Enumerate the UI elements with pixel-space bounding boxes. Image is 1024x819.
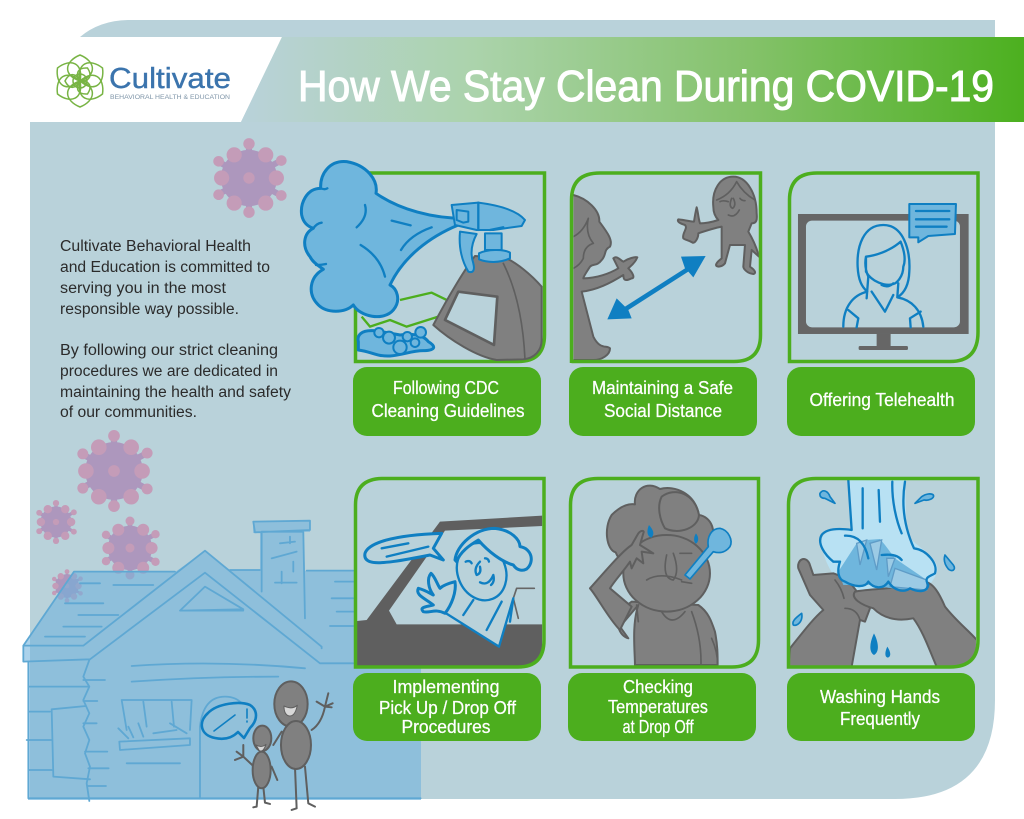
house fill: [23, 520, 421, 800]
virus particle: middle: [102, 516, 160, 580]
intro text: serving you in the most: [60, 280, 227, 297]
panel: CDC cleaning: [301, 162, 544, 362]
house illustration: [23, 520, 421, 810]
label: pick up and drop off: [353, 673, 541, 741]
label: CDC guidelines: Following CDC: [393, 378, 499, 398]
label: telehealth: Offering Telehealth: [810, 390, 954, 410]
label: washing hands: Washing Hands: [820, 687, 940, 707]
panel: social distance: [570, 173, 760, 363]
intro text: [60, 238, 291, 421]
label: pick up and drop off: Implementing: [392, 677, 500, 697]
family waving: [235, 681, 333, 810]
intro text: of our communities.: [60, 404, 197, 421]
icon: flower rosette: [51, 55, 109, 107]
panel: washing hands: [788, 478, 978, 667]
panel: telehealth: [790, 173, 978, 362]
frame: [788, 478, 978, 667]
label: telehealth: [787, 367, 975, 436]
speech bubble: [202, 703, 256, 739]
wordmark: Cultivate: [109, 63, 231, 95]
intro text: procedures we are dedicated in: [60, 363, 278, 380]
label: temperatures: [568, 673, 756, 741]
frame: [790, 173, 978, 362]
illustration: two people and arrow: [570, 177, 759, 360]
illustration: person with thermometer: [590, 486, 731, 665]
house outlines: [23, 521, 421, 801]
label: CDC guidelines: [353, 367, 541, 436]
frame: [356, 478, 544, 667]
virus particle: upper left: [77, 430, 153, 512]
illustration: hands under water: [788, 478, 978, 667]
frame: [572, 173, 760, 363]
intro text: and Education is committed to: [60, 259, 270, 276]
intro text: By following our strict cleaning: [60, 342, 278, 359]
illustration: driver in car: [357, 516, 542, 666]
label: temperatures: Temperatures: [608, 697, 708, 717]
label: CDC guidelines: Cleaning Guidelines: [372, 401, 524, 421]
panel: temperature check: [570, 478, 758, 667]
frame: [356, 173, 544, 362]
intro text: maintaining the health and safety: [60, 384, 291, 401]
logo plate: [30, 37, 282, 122]
virus particle: small left: [36, 500, 77, 544]
label: washing hands: Frequently: [840, 709, 920, 729]
intro text: Cultivate Behavioral Health: [60, 238, 251, 255]
label: pick up and drop off: Pick Up / Drop Off: [379, 698, 517, 718]
logo: [51, 55, 231, 107]
header banner: [30, 37, 1024, 122]
label: social distance: [569, 367, 757, 436]
illustration: spray bottle: [301, 162, 542, 360]
label: social distance: Social Distance: [604, 401, 722, 421]
label: social distance: Maintaining a Safe: [592, 378, 733, 398]
label: pick up and drop off: Procedures: [402, 717, 490, 737]
panel: pick up and drop off: [356, 478, 544, 667]
title bar: [241, 37, 1024, 122]
tagline: BEHAVIORAL HEALTH & EDUCATION: [110, 94, 230, 101]
label: temperatures: at Drop Off: [622, 717, 694, 737]
virus particle: top: [213, 138, 287, 218]
label: temperatures: Checking: [623, 677, 693, 697]
intro text: responsible way possible.: [60, 301, 239, 318]
illustration: monitor with woman: [798, 204, 969, 350]
virus particle: on roof: [52, 569, 83, 603]
label: washing hands: [787, 673, 975, 741]
frame: [570, 478, 758, 667]
